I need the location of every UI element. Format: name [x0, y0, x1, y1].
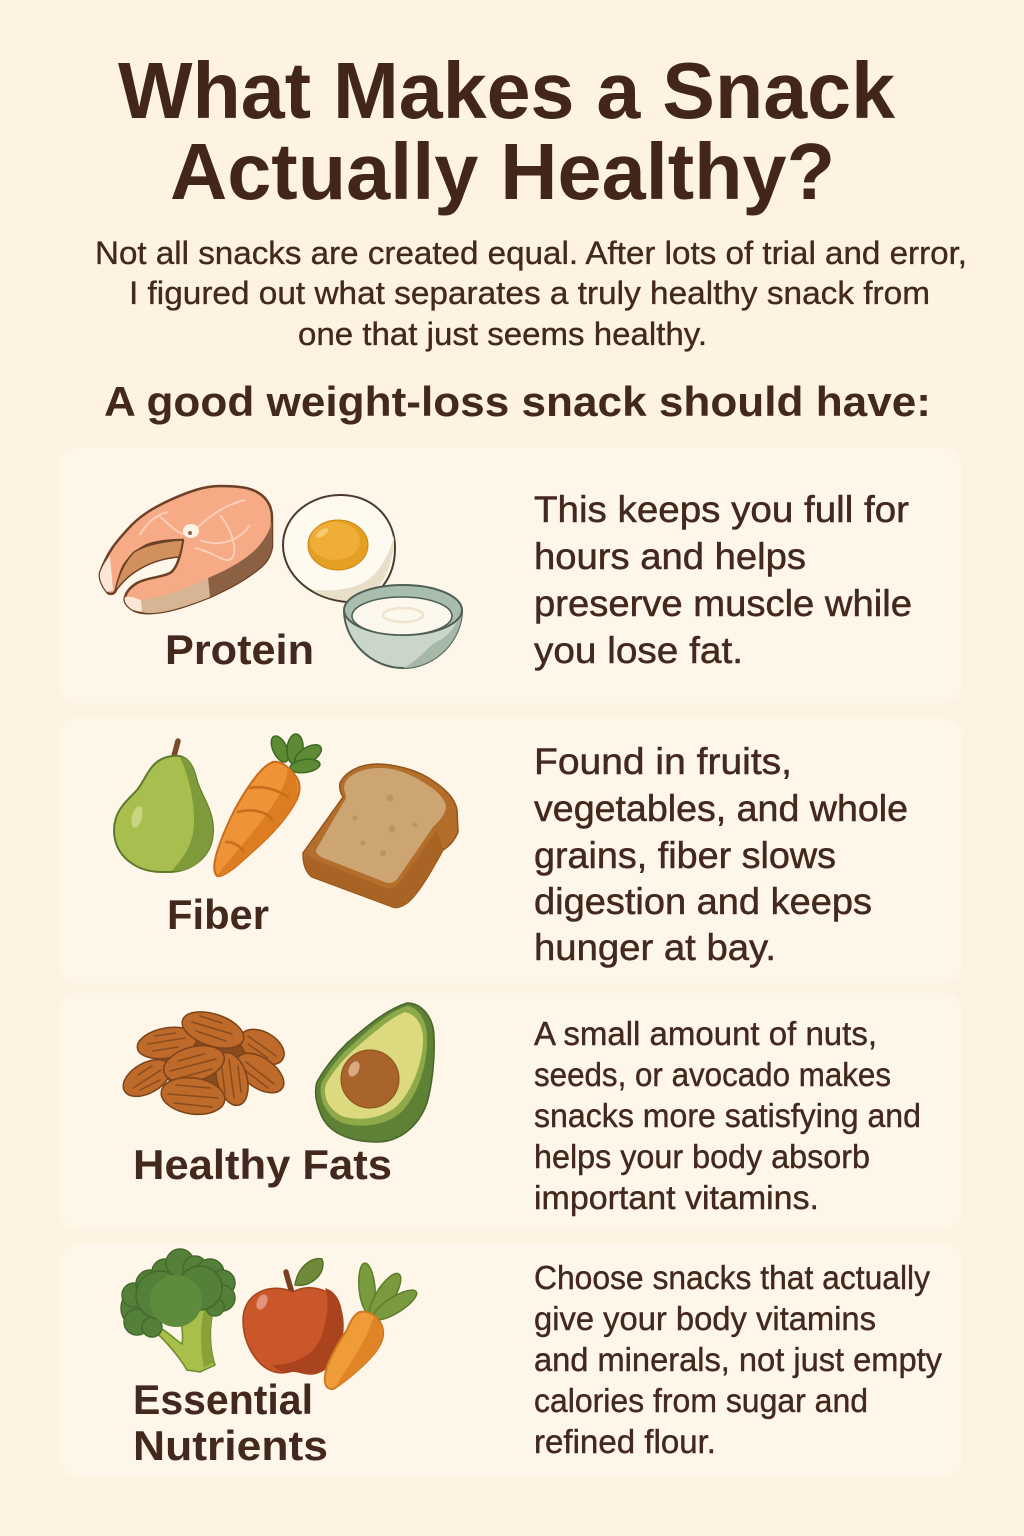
description: fiber: vegetables, and whole [534, 788, 908, 829]
intro text: one that just seems healthy. [298, 316, 707, 352]
description: healthy fats: A small amount of nuts, [534, 1015, 877, 1052]
description: fiber [534, 741, 908, 968]
description: essential nutrients: Choose snacks that actually [534, 1259, 930, 1296]
description: essential nutrients: give your body vitamins [534, 1300, 876, 1337]
label: protein: Protein [165, 626, 314, 673]
icon: pear [114, 741, 213, 872]
label: healthy fats: Healthy Fats [133, 1141, 392, 1188]
description: healthy fats: snacks more satisfying and [534, 1097, 921, 1134]
description: healthy fats: important vitamins. [534, 1179, 819, 1216]
description: protein: preserve muscle while [534, 583, 912, 624]
description: fiber: digestion and keeps [534, 881, 872, 922]
label: fiber: Fiber [167, 891, 269, 938]
icon: carrot with leaves [325, 1262, 420, 1389]
panel: healthy fats [60, 993, 962, 1230]
icon: apple [243, 1259, 343, 1374]
description: essential nutrients: and minerals, not just empty [534, 1341, 942, 1378]
icon: bread slice [303, 764, 458, 908]
label: essential nutrients: Nutrients [133, 1422, 328, 1469]
description: fiber: hunger at bay. [534, 927, 776, 968]
panel: protein [60, 447, 962, 703]
description: protein [534, 489, 912, 671]
label: essential nutrients [133, 1376, 328, 1469]
description: fiber: grains, fiber slows [534, 835, 836, 876]
description: healthy fats: helps your body absorb [534, 1138, 870, 1175]
title [118, 46, 895, 216]
description: essential nutrients: refined flour. [534, 1423, 716, 1460]
icon: broccoli [121, 1249, 235, 1372]
subheading: A good weight-loss snack should have: [104, 378, 931, 425]
title: What Makes a Snack [118, 46, 895, 135]
title: Actually Healthy? [170, 127, 835, 216]
icon: almonds [117, 1005, 291, 1118]
panel: essential nutrients [60, 1243, 962, 1477]
description: protein: you lose fat. [534, 630, 743, 671]
description: protein: This keeps you full for [534, 489, 909, 530]
icon: boiled egg [283, 495, 395, 602]
description: essential nutrients [534, 1259, 942, 1460]
description: healthy fats: seeds, or avocado makes [534, 1056, 891, 1093]
icon: bowl of yogurt [344, 585, 462, 668]
intro text: I figured out what separates a truly healthy snack from [129, 275, 930, 311]
intro text [95, 235, 967, 352]
description: healthy fats [534, 1015, 921, 1216]
description: protein: hours and helps [534, 536, 806, 577]
description: essential nutrients: calories from sugar and [534, 1382, 868, 1419]
panel: fiber [60, 718, 962, 983]
icon: carrot [214, 733, 325, 876]
icon: salmon steak [100, 486, 272, 613]
label: essential nutrients: Essential [133, 1376, 313, 1423]
icon: avocado [316, 1003, 434, 1142]
description: fiber: Found in fruits, [534, 741, 792, 782]
intro text: Not all snacks are created equal. After lots of trial and error, [95, 235, 967, 271]
